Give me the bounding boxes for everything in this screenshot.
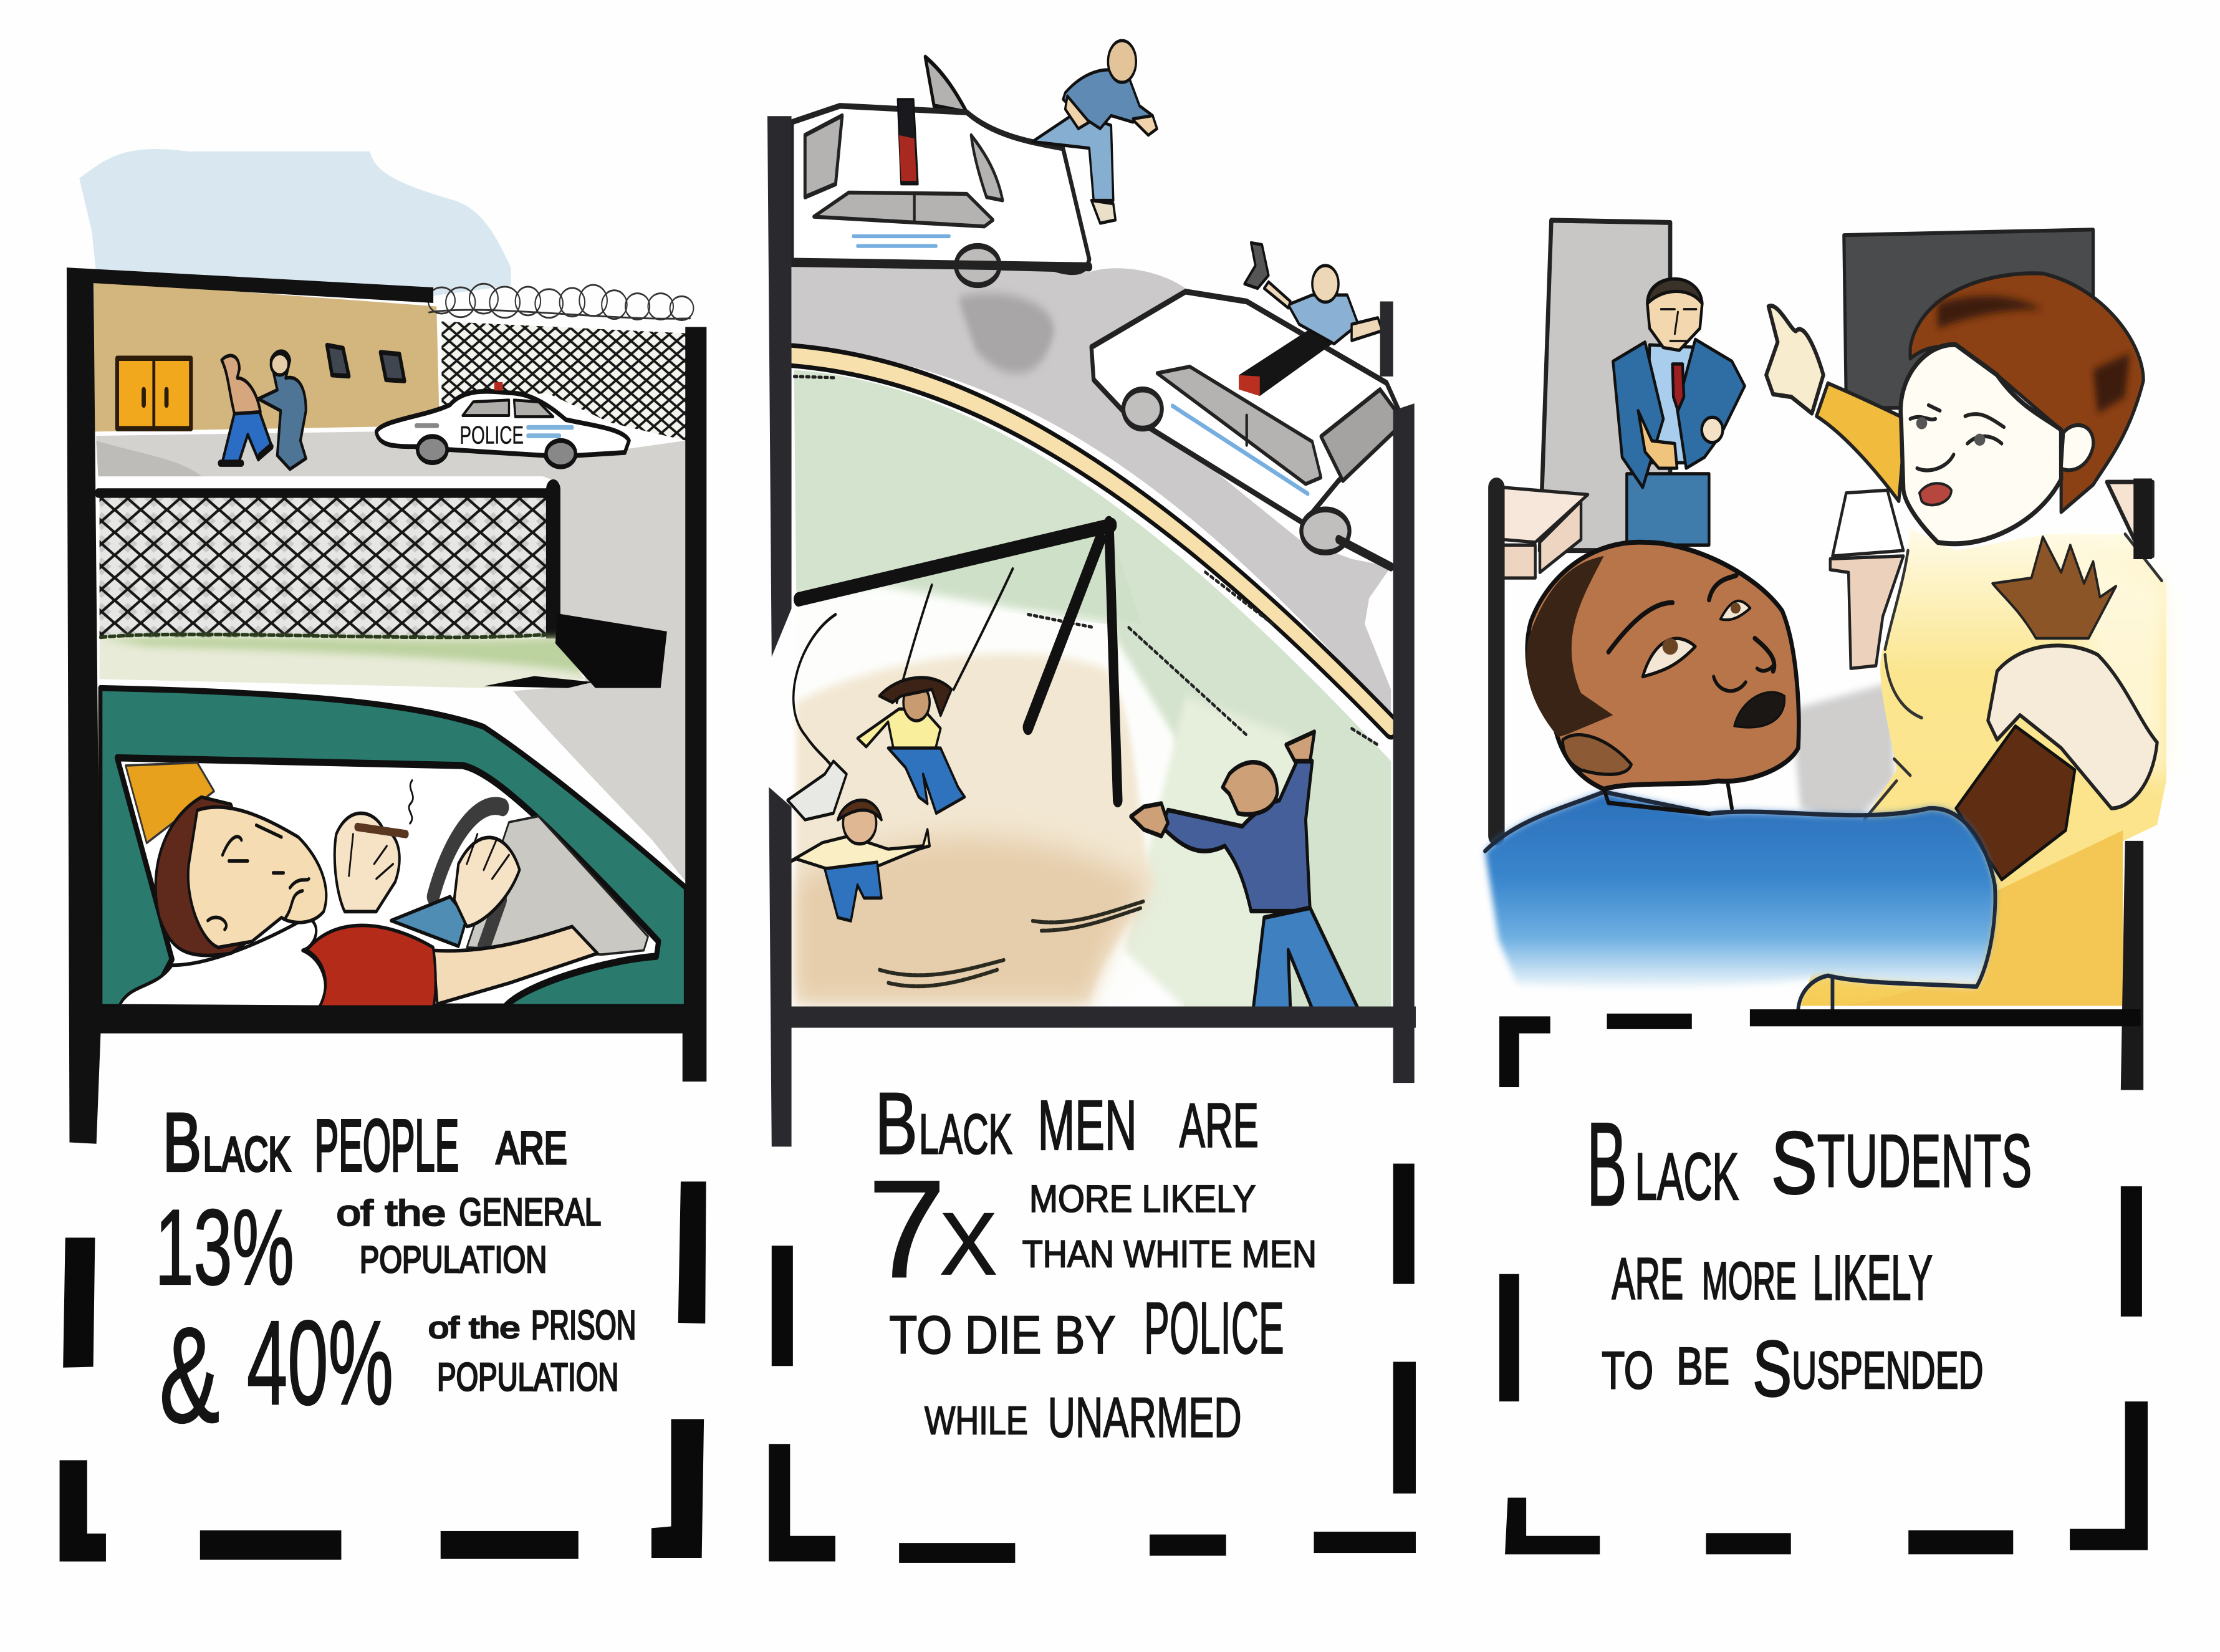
caption: Black students statistic: LIKELY [1813,1242,1933,1313]
panel: police and playground scene, Black men [767,41,1416,1563]
flying swing seat [787,761,847,820]
doorway [1540,220,1670,550]
line: than white men: THAN WHITE MEN [1022,1232,1317,1275]
right frame segment [2121,479,2152,1090]
caption: Black men statistic: ARE [1180,1091,1259,1160]
dashed frame [1499,1009,2148,1554]
grass [100,638,585,688]
fence shadow [484,613,667,688]
driver [119,780,597,1007]
caption: Black men statistic: MEN [1038,1086,1137,1165]
panel: prison and driving scene, Black people [60,149,706,1562]
swing set [794,523,1118,800]
road [96,431,686,882]
illustration: park shooting scene [783,41,1404,1009]
line: Black People are [163,1095,567,1189]
caption and dashed frame: GENERAL [459,1190,601,1234]
sand hatch marks [880,901,1144,986]
car body [100,688,686,1007]
razor wire [428,284,693,320]
woman: face [1901,345,2061,544]
car lettering: POLICE [459,422,524,449]
line: more likely: MORE LIKELY [1029,1177,1256,1220]
right-hand desk [1830,482,2153,668]
woman: gripping hand [1988,645,2157,809]
line: Black People are: LACK [203,1128,291,1181]
dark board [1844,229,2093,408]
line: of the General: of the [337,1193,446,1233]
wall wash [1791,682,1894,827]
dashed frame below [769,1164,1416,1563]
caption: Black men statistic [868,1075,1317,1449]
woman: pointing hand [1766,305,1824,413]
grass tufts [794,377,1378,745]
panel frame [67,267,706,1144]
seat headrest [125,762,214,843]
caption: Black students statistic: S [1752,1325,1792,1413]
boy: facial features [1608,575,1785,728]
line: are more likely: ARE [1612,1246,1683,1312]
illustration: prison exterior with white driver [79,149,693,1007]
woman: dress [1800,529,2166,1006]
line: while unarmed: WHILE [925,1398,1028,1443]
man in suit [1613,279,1745,545]
dashboard [467,816,648,954]
stat: 7x: 7 [868,1152,946,1307]
woman: arm [1817,383,1906,501]
curb [792,355,1391,728]
line: to die by police: TO DIE BY [889,1305,1116,1365]
police car [377,382,629,467]
sand patch [796,654,1155,1002]
line: of the Prison: of the [428,1312,520,1345]
police car two [1092,292,1404,567]
caption: Black men statistic: POLICE [1144,1287,1284,1370]
car window interior [117,758,658,1007]
child running [783,800,930,921]
park lawn [794,370,1391,1009]
prison building [94,281,440,431]
line: Students: S [1771,1113,1817,1213]
left wall and desk [1496,487,1588,836]
line: Population 2: POPULATION [437,1355,618,1399]
road [792,266,1391,716]
caption: Black students statistic: B [1587,1097,1627,1231]
caption: Black students statistic: LACK [1635,1139,1739,1214]
line: Black People are: B [163,1095,201,1189]
caption: Black students statistic: BE [1676,1337,1729,1396]
caption and dashed frame: PRISON [531,1302,636,1348]
caption: Black students statistic [1587,1097,2032,1413]
ampersand: & [160,1299,219,1451]
caption: Black students statistic: USPENDED [1792,1341,1983,1400]
stat: 13%: 13% [155,1187,294,1307]
child on swing [857,678,964,814]
near chain-link fence [99,489,553,637]
caption: Black students statistic: TUDENTS [1817,1119,2032,1203]
caption: Black men statistic: LACK [919,1103,1012,1166]
figure: man under arrest [221,355,272,463]
sky wash [79,149,511,297]
woman: hair [1910,273,2143,512]
officer with gun [1244,243,1393,377]
caption and dashed frame [60,1095,706,1562]
caption and dashed frame: 40% [247,1296,393,1429]
line: Population: POPULATION [360,1239,547,1281]
illustration: teacher grabbing student [1485,220,2166,1009]
boy: head [1527,542,1799,789]
line: Black People are: ARE [496,1123,567,1174]
panel frame [767,116,1416,1146]
unarmed man with raised arms [1131,732,1358,1009]
back chain-link fence [441,321,686,441]
boy: raised hand [1992,537,2116,638]
boy: shirt [1485,792,1995,987]
line: Black Men are: B [875,1075,918,1173]
steering wheel [433,806,502,948]
dashed frame below [60,1181,706,1562]
line: Black People are: PEOPLE [315,1105,459,1186]
line: to be suspended: TO [1602,1341,1653,1400]
figure: arresting officer [258,351,306,469]
caption: Black men statistic: X [940,1195,997,1293]
boy: arm [1956,726,2075,880]
caption: Black men statistic: UNARMED [1048,1386,1242,1449]
officer leaving car [1032,41,1157,223]
police car one [792,57,1089,285]
caption: Black students statistic: MORE [1702,1252,1797,1310]
panel: classroom scene, Black students [1485,220,2166,1554]
